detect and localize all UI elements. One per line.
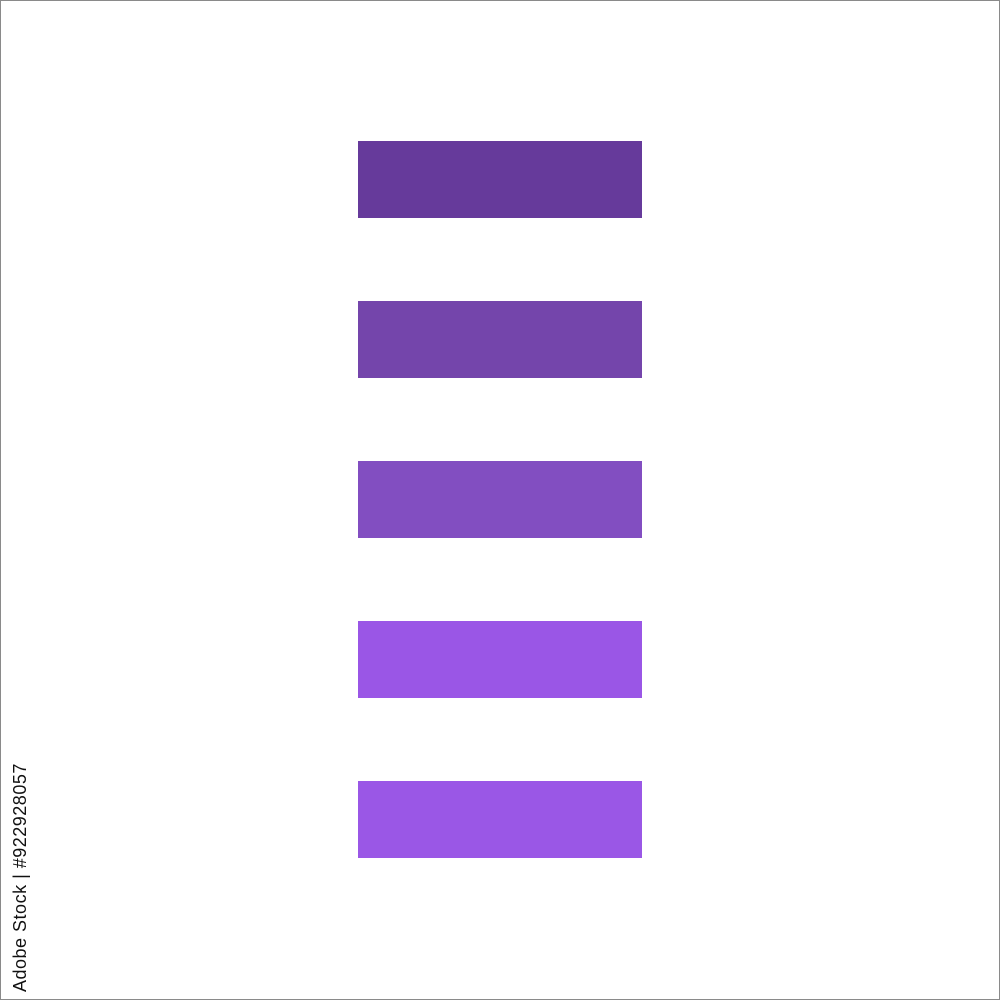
bar 1: [358, 141, 642, 218]
bar 4: [358, 621, 642, 698]
credit text: Adobe Stock | #922928057: [10, 763, 30, 992]
bar 5: [358, 781, 642, 858]
bar 2: [358, 301, 642, 378]
bar 3: [358, 461, 642, 538]
